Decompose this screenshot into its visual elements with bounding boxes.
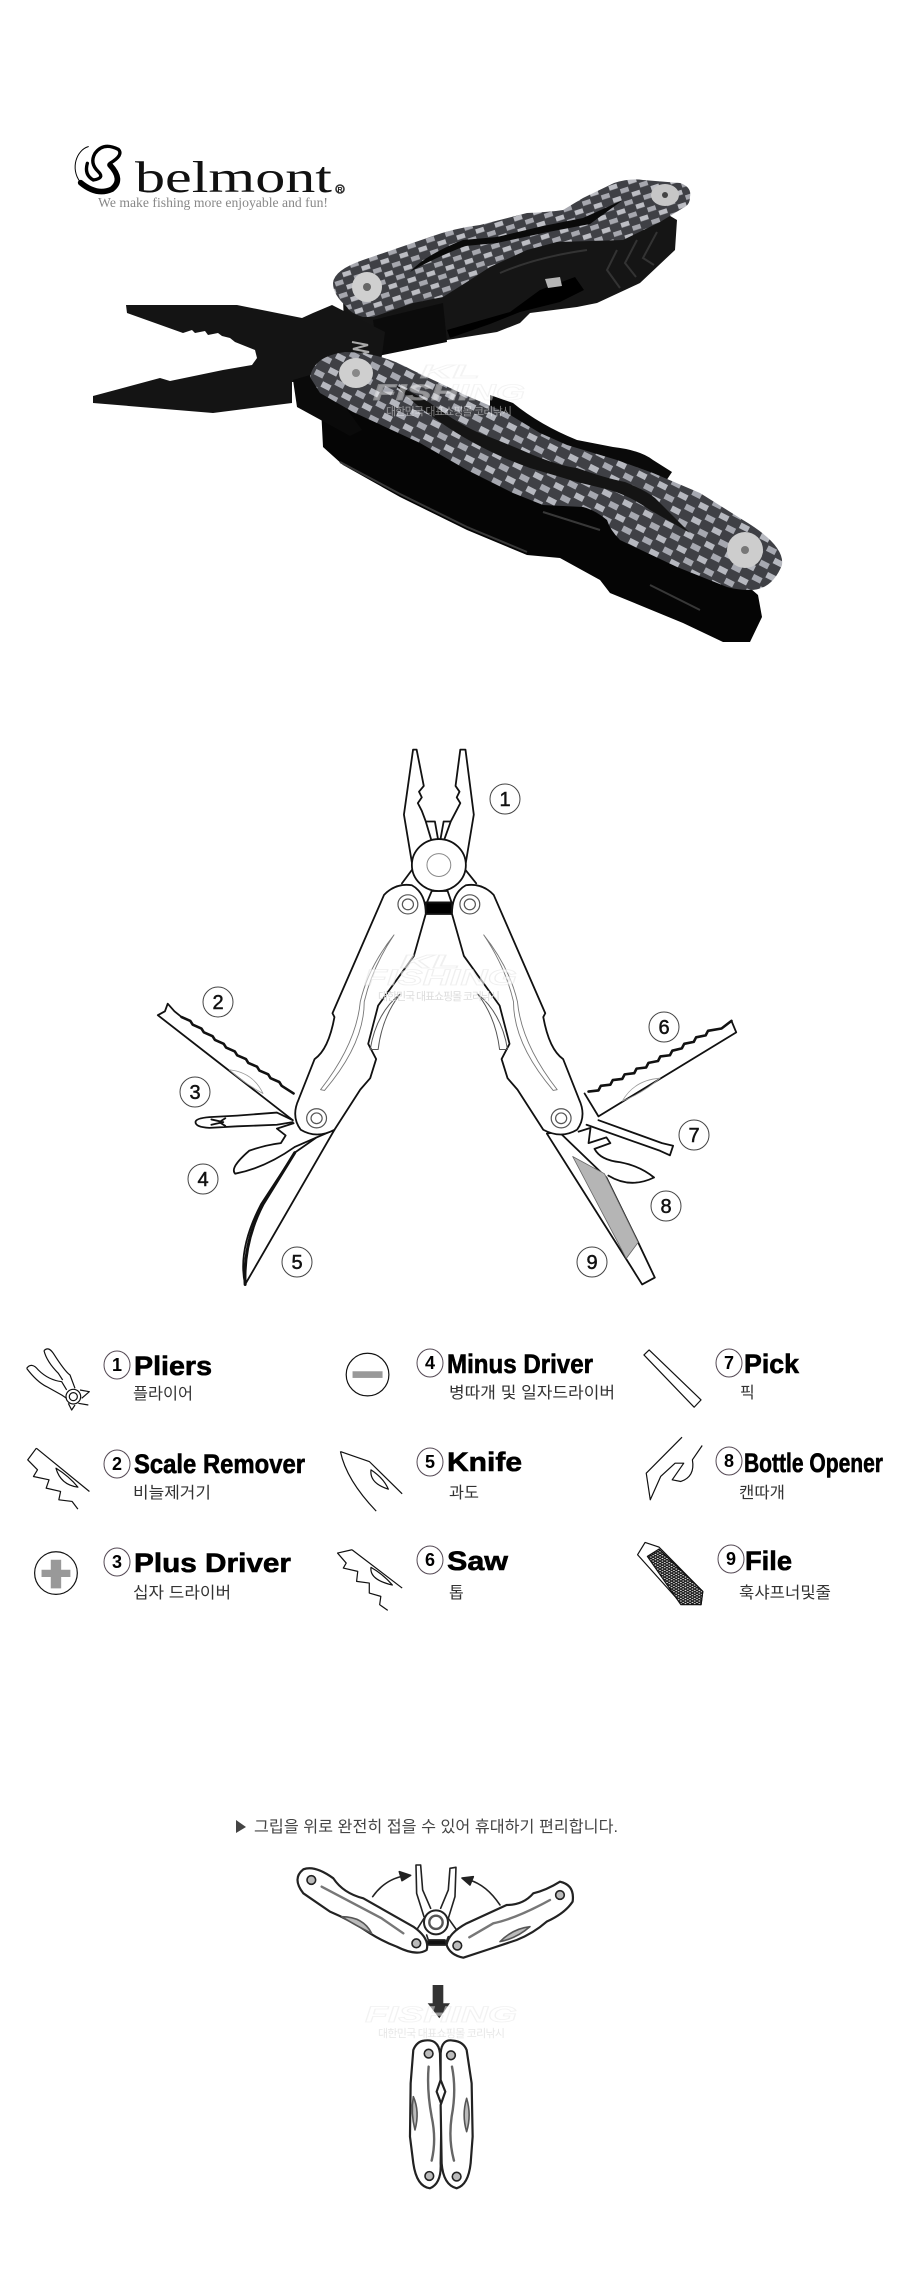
legend item 6: saw: 6	[425, 1550, 435, 1570]
pliers jaws and head	[93, 305, 385, 413]
legend item 1: pliers: Pliers	[134, 1351, 212, 1381]
right grip handle	[452, 885, 583, 1135]
legend item 4: minus driver: Minus Driver	[447, 1349, 593, 1379]
callout 3	[180, 1077, 210, 1107]
callout 8	[651, 1191, 681, 1221]
callout 5: 5	[291, 1252, 303, 1274]
watermark on folding diagram	[365, 2002, 517, 2040]
callout 9: 9	[586, 1252, 598, 1274]
legend item 1: pliers: 1	[112, 1355, 122, 1375]
watermark on photo	[373, 362, 525, 418]
down arrow	[428, 1985, 450, 2018]
legend item 5: knife: 5	[425, 1452, 435, 1472]
legend item 3: plus driver: 십자 드라이버	[133, 1584, 231, 1602]
legend item 1: pliers	[104, 1351, 212, 1403]
watermark tagline: 대한민국 대표쇼핑몰 코리낚시	[378, 2027, 505, 2040]
tool 6 saw	[585, 1021, 736, 1116]
exploded tool diagram	[158, 750, 736, 1284]
tool 2 scale remover	[158, 1004, 294, 1120]
icon: file	[638, 1542, 703, 1605]
tool 4 bottle opener	[234, 1123, 317, 1174]
watermark tagline: 대한민국 대표쇼핑몰 코리낚시	[378, 990, 500, 1003]
legend item 5: knife	[417, 1447, 522, 1502]
registered mark: R	[337, 187, 343, 194]
icon: saw	[338, 1550, 402, 1610]
screw: lower far	[727, 532, 763, 568]
watermark logo: KL	[420, 362, 480, 382]
product photo: multi-tool pliers	[93, 179, 782, 642]
caption bullet	[236, 1820, 246, 1833]
legend item 2: scale remover: 2	[112, 1454, 122, 1474]
screw: upper near	[352, 272, 382, 302]
tool 5 knife	[243, 1130, 334, 1284]
legend item 5: knife: 과도	[449, 1484, 479, 1502]
watermark on diagram	[364, 952, 517, 1003]
callout 7: 7	[688, 1125, 700, 1147]
icon: pliers	[27, 1349, 89, 1410]
pliers shoulders	[402, 870, 476, 902]
lower grip slit	[395, 385, 690, 533]
legend item 2: scale remover: 비늘제거기	[133, 1484, 211, 1502]
lower handle black body	[320, 390, 762, 642]
legend item 3: plus driver: Plus Driver	[134, 1548, 292, 1578]
legend icons	[28, 1350, 703, 1610]
icon: pick	[644, 1350, 701, 1407]
callout 3: 3	[189, 1082, 201, 1104]
legend item 4: minus driver	[417, 1349, 615, 1402]
icon: scale remover	[28, 1448, 89, 1509]
upper grip slit	[410, 200, 623, 272]
legend item 1: pliers: 플라이어	[133, 1385, 193, 1403]
upper handle black body	[343, 210, 677, 357]
legend item 9: file	[718, 1545, 831, 1602]
legend item 7: pick	[716, 1349, 800, 1402]
brand name: belmont	[135, 153, 332, 202]
callout 2: 2	[212, 992, 224, 1014]
spring	[352, 342, 369, 356]
folding step: left handle	[297, 1868, 427, 1953]
icon: minus driver	[346, 1353, 389, 1396]
callout 1: 1	[499, 789, 511, 811]
screw: upper far	[651, 184, 679, 206]
tool 3 plus driver	[196, 1113, 293, 1128]
number callouts on diagram	[180, 784, 709, 1277]
watermark logo: KL	[400, 952, 460, 972]
lower carbon grip plate	[310, 352, 782, 590]
tool 9 file	[547, 1132, 655, 1284]
lower black ridge	[490, 395, 672, 490]
callout 6: 6	[658, 1017, 670, 1039]
callout 8: 8	[660, 1196, 672, 1218]
screw: lower near	[339, 358, 373, 388]
watermark brand: FISHING	[373, 380, 525, 405]
left grip handle	[295, 885, 426, 1135]
legend item 4: minus driver: 병따개 및 일자드라이버	[449, 1384, 615, 1402]
caption text: 그립을 위로 완전히 접을 수 있어 휴대하기 편리합니다.	[254, 1818, 618, 1836]
legend item 2: scale remover: Scale Remover	[134, 1449, 305, 1479]
tool 7 pick	[587, 1120, 673, 1155]
folding step: jaws	[416, 1865, 457, 1945]
icon: knife	[340, 1452, 402, 1511]
watermark brand: FISHING	[364, 965, 517, 990]
callout 7	[679, 1120, 709, 1150]
watermark tagline: 대한민국 대표쇼핑몰 코리낚시	[386, 405, 512, 418]
folding diagram	[297, 1865, 573, 2188]
callout 2	[203, 987, 233, 1017]
legend item 4: minus driver: 4	[425, 1353, 435, 1373]
lower jaw bracket	[293, 375, 362, 436]
legend item 8: bottle opener: 캔따개	[739, 1484, 785, 1502]
legend item 5: knife: Knife	[447, 1447, 522, 1477]
registered mark	[336, 185, 344, 194]
watermark brand: FISHING	[365, 2002, 517, 2027]
curved arrow right	[462, 1877, 500, 1905]
brand logo	[75, 146, 344, 211]
legend item 7: pick: 픽	[740, 1384, 755, 1402]
callout 4	[188, 1164, 218, 1194]
legend item 6: saw: 톱	[449, 1584, 464, 1602]
callout 6	[649, 1012, 679, 1042]
legend item 7: pick: Pick	[744, 1349, 800, 1379]
legend item 9: file: 9	[726, 1549, 736, 1569]
legend item 9: file: File	[745, 1546, 792, 1576]
tagline: We make fishing more enjoyable and fun!	[98, 196, 328, 211]
legend item 3: plus driver: 3	[112, 1552, 122, 1572]
closed tool	[410, 2040, 473, 2188]
logo mark	[75, 146, 120, 192]
legend item 6: saw: Saw	[447, 1546, 509, 1576]
callout 5	[282, 1247, 312, 1277]
tool legend	[27, 1349, 883, 1610]
upper carbon grip plate	[333, 179, 690, 317]
callout 9	[577, 1247, 607, 1277]
icon: plus driver	[35, 1552, 77, 1594]
folding caption	[236, 1818, 618, 1836]
legend item 7: pick: 7	[724, 1353, 734, 1373]
pivot neck	[426, 902, 452, 914]
legend item 8: bottle opener: 8	[724, 1451, 734, 1471]
pliers jaws	[404, 750, 474, 862]
callout 1	[490, 784, 520, 814]
icon: bottle opener	[646, 1437, 702, 1500]
folding step: right handle	[447, 1882, 573, 1958]
pliers pivot circle	[412, 839, 466, 891]
legend item 9: file: 훅샤프너및줄	[739, 1584, 831, 1602]
tool 8 bottle opener	[579, 1128, 654, 1183]
curved arrow left	[373, 1872, 411, 1897]
callout 4: 4	[197, 1169, 209, 1191]
legend item 2: scale remover	[104, 1449, 305, 1502]
legend item 3: plus driver	[104, 1548, 292, 1602]
legend item 8: bottle opener	[716, 1447, 883, 1502]
legend item 6: saw	[417, 1546, 509, 1602]
